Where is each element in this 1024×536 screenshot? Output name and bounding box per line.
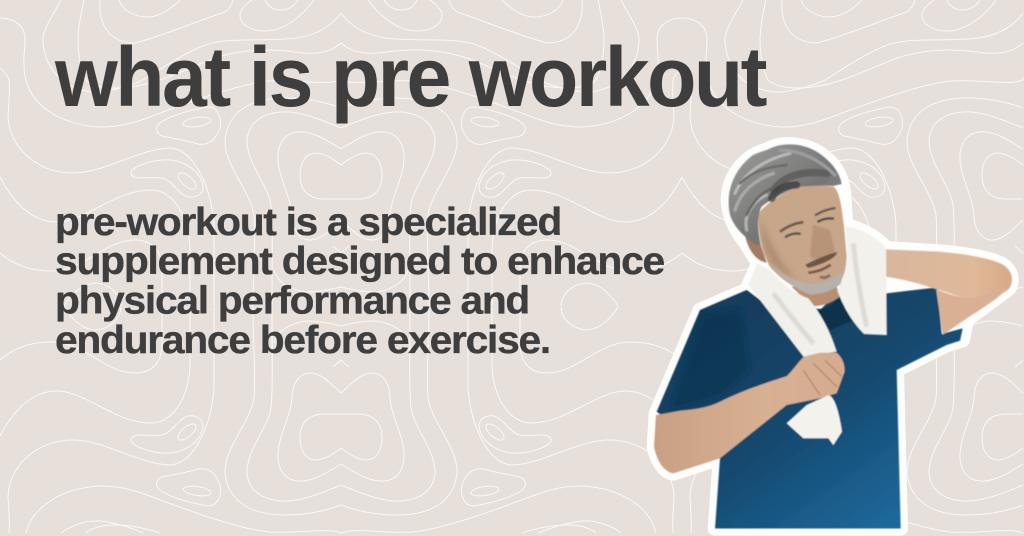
shirt shading: [670, 310, 750, 410]
left forearm and hand: [654, 353, 845, 473]
hair strands: [735, 150, 835, 230]
body text block: supplement designed to enhance: [55, 240, 665, 283]
body text block: physical performance and: [55, 280, 529, 322]
title: what is pre workout: [54, 30, 767, 124]
nose and mouth: [805, 225, 837, 278]
shirt collar: [812, 293, 853, 330]
face: [758, 185, 847, 293]
towel end below hand: [787, 395, 842, 445]
figure details: [654, 144, 1012, 528]
neck: [792, 287, 840, 306]
white sticker outline: [654, 144, 1011, 528]
brows and eyes: [780, 208, 835, 237]
towel left band: [748, 263, 837, 357]
beard: [770, 262, 844, 295]
body text block: pre-workout is a specialized: [55, 201, 561, 244]
right upper arm: [936, 287, 1009, 335]
face shading: [760, 220, 797, 280]
ear: [745, 236, 767, 263]
body text block: endurance before exercise.: [55, 319, 550, 362]
finger creases: [803, 360, 842, 395]
body text block: [55, 201, 665, 362]
right forearm behind neck: [886, 249, 1012, 298]
person with towel cutout: [654, 144, 1012, 528]
hair: [729, 144, 842, 245]
shirt: [657, 287, 963, 528]
towel right band: [837, 226, 887, 335]
towel shading: [773, 243, 867, 343]
